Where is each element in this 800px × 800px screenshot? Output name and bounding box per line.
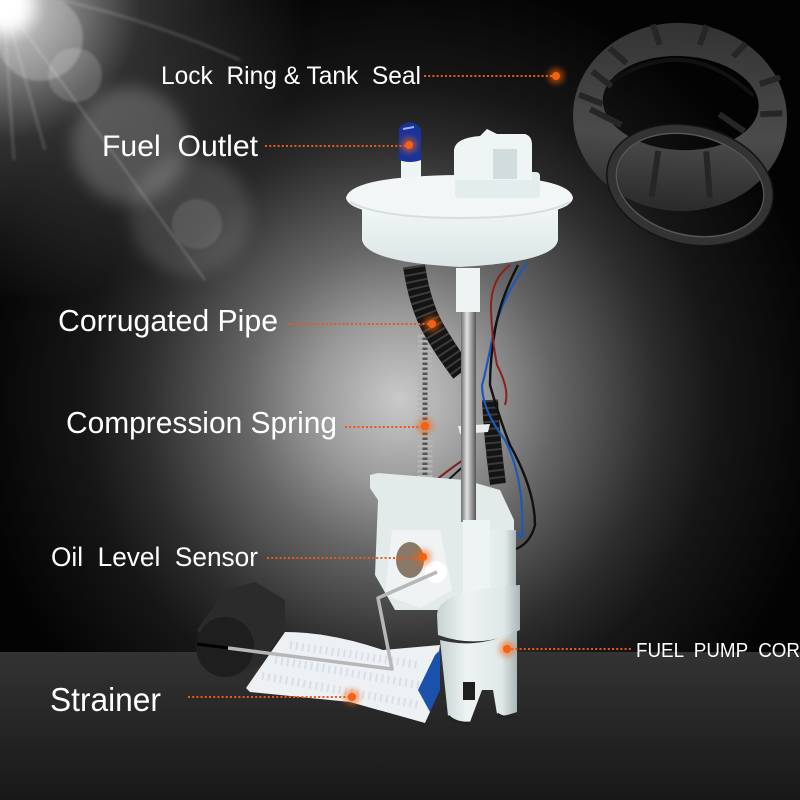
compression spring [422,335,428,478]
label: corrugated pipe: Corrugated Pipe [58,303,278,338]
leader lines [188,76,632,697]
label: compression spring: Compression Spring [66,405,337,440]
labels [50,62,800,718]
label: fuel outlet: Fuel Outlet [102,130,259,163]
fuel pump core [437,520,520,723]
clip on rod [458,424,490,434]
label: lock ring: Lock Ring & Tank Seal [161,62,421,90]
float [196,582,285,677]
fuel outlet [399,122,421,182]
pump assembly [196,122,573,723]
lens flare [0,0,274,281]
electrical connector [454,129,540,198]
marker dots [344,68,564,705]
wires [395,263,535,550]
tank seal [594,107,786,263]
rod [461,310,476,522]
fuel strainer [246,632,440,723]
lock ring [568,17,792,217]
fuel sensor [385,530,452,608]
flange [346,175,573,312]
corrugated pipe [414,266,498,484]
float arm [228,572,437,669]
label: oil level sensor: Oil Level Sensor [51,542,258,572]
pump bracket [370,473,514,610]
label: strainer: Strainer [50,681,161,718]
lock ring and tank seal [568,17,792,263]
